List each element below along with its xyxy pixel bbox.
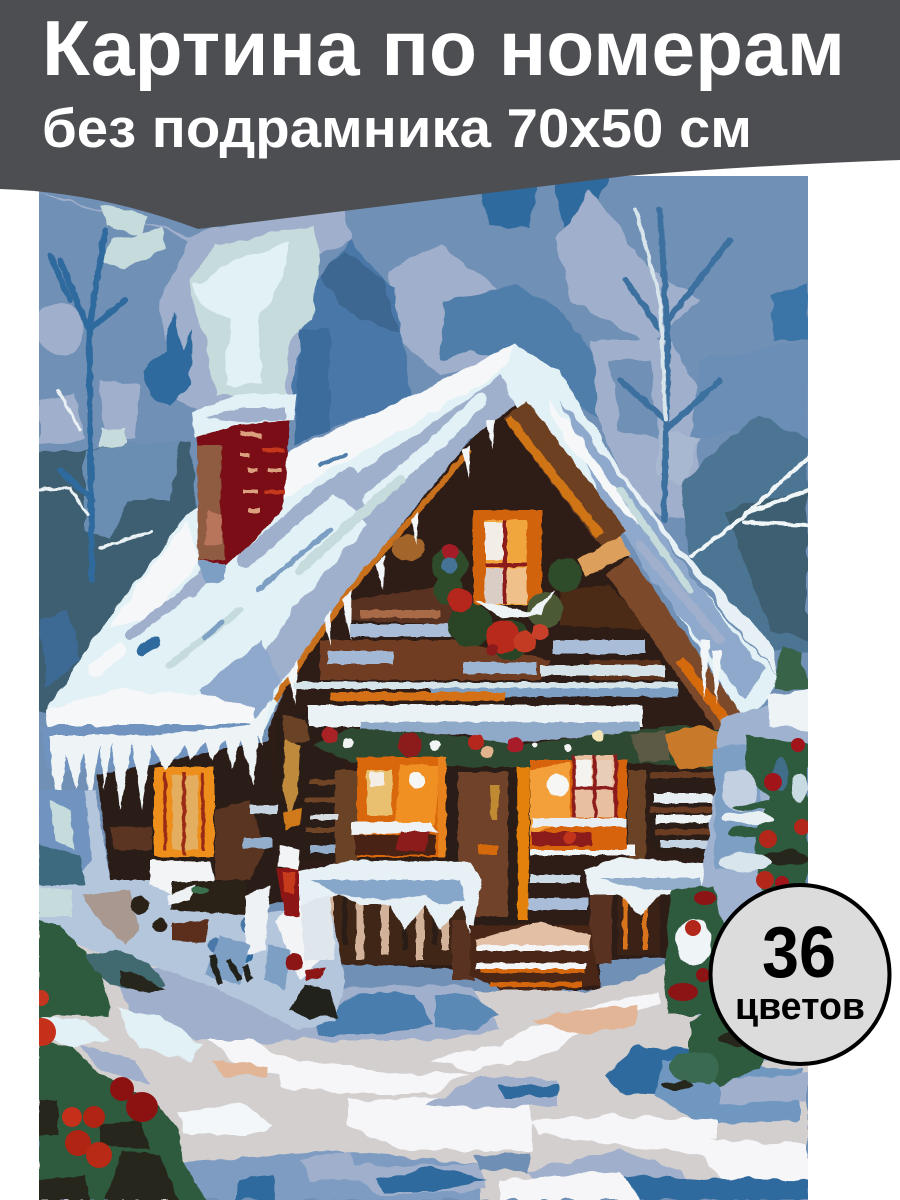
- title: Картина по номерам: [42, 4, 845, 92]
- right window: [530, 755, 627, 850]
- garland: [313, 725, 728, 770]
- painting: winter cottage: [28, 176, 810, 1200]
- badge: 36 colours: цветов: [735, 986, 865, 1028]
- winter forest background: [30, 176, 808, 712]
- small blue fir silhouette: [142, 312, 192, 408]
- icicles: [50, 700, 270, 815]
- cottage logs and walls: [97, 405, 725, 990]
- header banner: [0, 0, 900, 229]
- snowy ground: [39, 930, 808, 1200]
- chimney smoke: [192, 225, 320, 395]
- snowy roof: [45, 345, 782, 745]
- gable beams: [275, 410, 745, 745]
- badge: 36 colours: [710, 885, 890, 1064]
- porch steps: [470, 922, 600, 997]
- icicles along gable eaves: [288, 420, 722, 705]
- snow on logs: [243, 624, 718, 910]
- evergreen branch with berries: [39, 920, 206, 1200]
- roof snow streaks: [95, 400, 720, 670]
- bare tree branches: [40, 210, 808, 580]
- left window: [352, 757, 446, 857]
- decorated fir tree: [661, 647, 809, 1089]
- badge: 36 colours: 36: [762, 913, 836, 993]
- berries on evergreen: [28, 990, 158, 1168]
- eave underside shadow: [39, 725, 255, 775]
- upper window: [473, 510, 542, 605]
- door: [457, 766, 530, 920]
- wreath: [432, 544, 582, 660]
- subtitle: без подрамника 70х50 см: [42, 97, 752, 159]
- tree berries: [668, 738, 810, 1001]
- porch and railing: [297, 857, 728, 980]
- chimney: [192, 394, 297, 585]
- left wing window: [154, 767, 214, 857]
- snowy bushes: [39, 790, 345, 1030]
